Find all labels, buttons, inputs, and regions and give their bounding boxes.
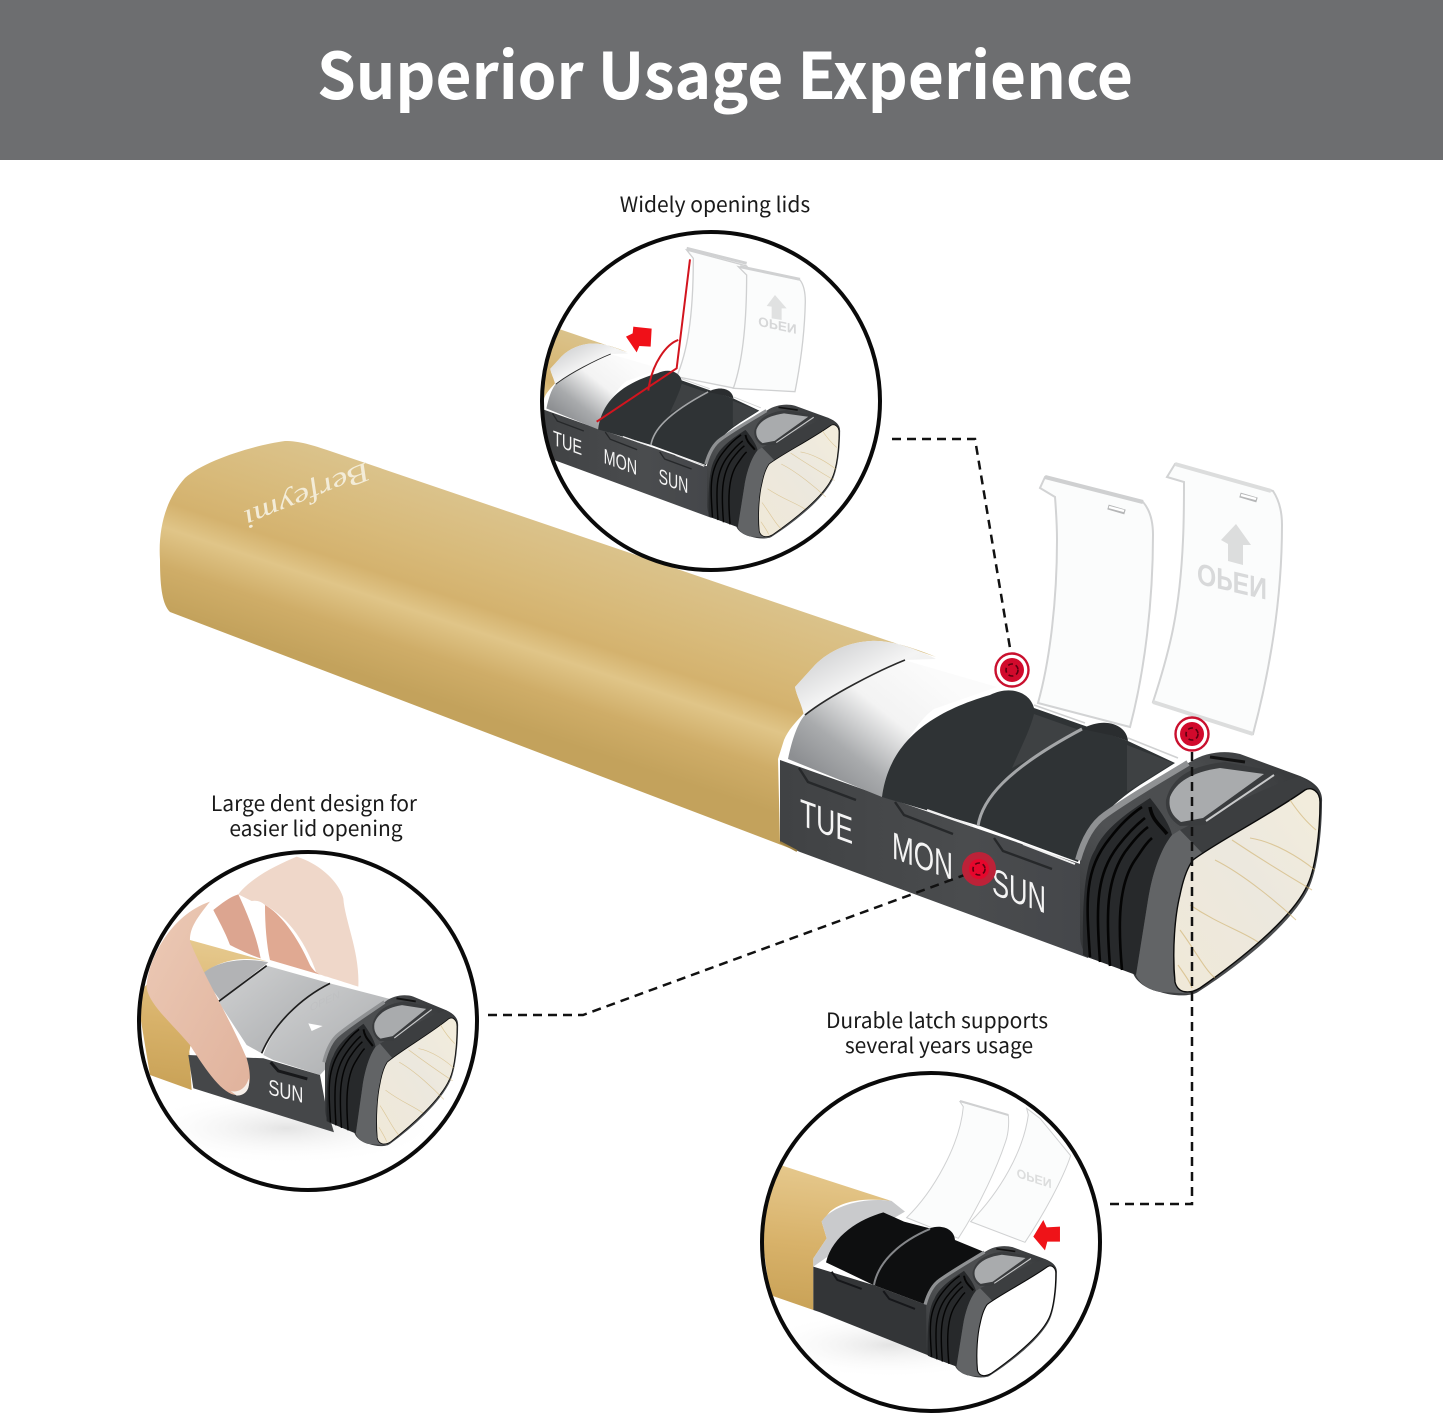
soft shadow bbox=[829, 1331, 928, 1360]
main product: pill case with open lids bbox=[160, 441, 1322, 995]
header banner bbox=[0, 0, 1443, 160]
day labels bbox=[800, 791, 1046, 922]
detail circle: widely opening lids bbox=[540, 230, 882, 572]
dashed connector: top circle to lid hinge bbox=[892, 439, 1012, 660]
caption: large dent design bbox=[211, 788, 418, 843]
empty compartments bbox=[826, 1212, 983, 1305]
open transparent lid with OPEN arrow: OPEN bbox=[1197, 556, 1267, 606]
red arrow bbox=[626, 327, 652, 352]
day labels in detail bbox=[553, 430, 688, 493]
open transparent lid, plain bbox=[1038, 477, 1153, 727]
lifted lids in detail bbox=[677, 248, 805, 392]
lifted lids in detail: OPEN bbox=[1017, 1165, 1052, 1191]
title: Superior Usage Experience bbox=[317, 26, 1133, 118]
gold case bbox=[137, 940, 268, 1090]
hand bbox=[147, 857, 358, 1096]
day labels in detail: SUN bbox=[659, 463, 688, 498]
SUN label: SUN bbox=[268, 1075, 303, 1108]
lifted lids in detail: OPEN bbox=[758, 314, 797, 337]
soft shadow bbox=[217, 1112, 353, 1144]
tray front bbox=[813, 1267, 957, 1367]
caption: durable latch bbox=[826, 1005, 1048, 1060]
red arrow bbox=[1033, 1220, 1060, 1250]
red angle lines bbox=[597, 259, 690, 422]
detail circle: large dent design with hand bbox=[133, 852, 477, 1190]
caption: widely opening lids: Widely opening lids bbox=[620, 189, 810, 219]
closed lids bbox=[202, 960, 390, 1075]
tray front bbox=[188, 1055, 334, 1132]
red marker: lid hinge bbox=[996, 654, 1028, 686]
red marker: latch bbox=[1176, 718, 1208, 750]
brand logo on case: Berfeymi bbox=[240, 456, 375, 534]
red marker: dent bbox=[962, 852, 996, 886]
day labels: TUE bbox=[800, 791, 853, 853]
closed lids: OPEN bbox=[310, 989, 340, 1014]
gold case bbox=[757, 1164, 892, 1310]
detail circle: durable latch bbox=[757, 1073, 1100, 1411]
day labels in detail: MON bbox=[604, 444, 637, 480]
caption: large dent design: easier lid opening bbox=[229, 813, 403, 843]
caption: durable latch: Durable latch supports bbox=[826, 1005, 1048, 1035]
caption: large dent design: Large dent design for bbox=[211, 788, 418, 818]
day labels in detail: TUE bbox=[553, 425, 582, 460]
open transparent lid with OPEN arrow bbox=[1153, 464, 1282, 734]
day labels: SUN bbox=[992, 860, 1046, 922]
day labels: MON bbox=[892, 824, 953, 889]
dashed connector: left circle to dent bbox=[488, 873, 970, 1015]
dashed connector: bottom circle to latch bbox=[1110, 745, 1192, 1204]
case mouth bbox=[813, 1200, 905, 1267]
caption: durable latch: several years usage bbox=[845, 1030, 1033, 1060]
lifted lids in detail bbox=[907, 1101, 1071, 1242]
